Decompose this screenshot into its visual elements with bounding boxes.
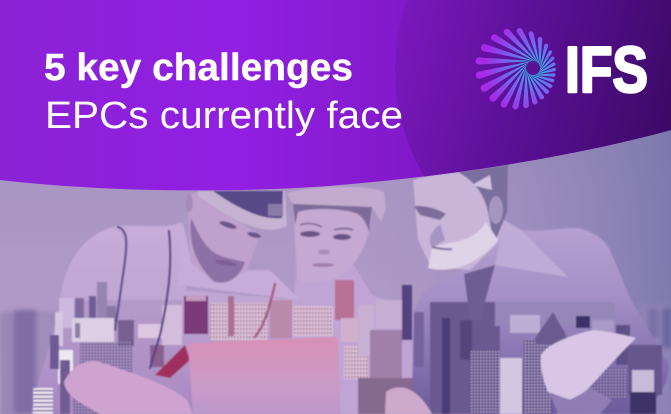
left man: shoulder straps bbox=[115, 227, 275, 368]
city inside figures bbox=[33, 280, 662, 414]
left man: hard hat bbox=[198, 191, 287, 230]
logo wordmark: IFS bbox=[565, 33, 648, 106]
old man: shirt bbox=[412, 220, 668, 414]
woman: hair and facial features bbox=[293, 204, 372, 267]
woman: hard hat bbox=[287, 187, 386, 222]
woman: body bbox=[280, 262, 412, 414]
title bbox=[44, 47, 403, 137]
left man: face bbox=[187, 192, 260, 283]
old man: held hard hat bbox=[541, 330, 636, 400]
left man: facial features bbox=[185, 194, 261, 267]
old man: hand bbox=[550, 388, 612, 414]
title: EPCs currently face bbox=[45, 95, 403, 137]
header banner bbox=[0, 0, 671, 190]
old man: hair, beard and features bbox=[414, 165, 508, 270]
old man: tie bbox=[464, 265, 495, 320]
old man: head bbox=[413, 166, 508, 270]
left man: beard bbox=[190, 218, 245, 283]
icon: spiral rays bbox=[475, 27, 556, 110]
left man: neck and collar bbox=[178, 222, 300, 300]
photo: three engineers double-exposed with a city bbox=[31, 165, 668, 414]
old man: hand on tablet bbox=[385, 387, 432, 414]
left man: torso bbox=[31, 222, 300, 414]
IFS logo bbox=[475, 27, 648, 110]
left man: forearm bbox=[64, 361, 193, 414]
old man: collar bbox=[495, 220, 568, 277]
laptop bbox=[188, 337, 341, 414]
title: 5 key challenges bbox=[44, 47, 353, 89]
woman: face bbox=[293, 204, 372, 283]
